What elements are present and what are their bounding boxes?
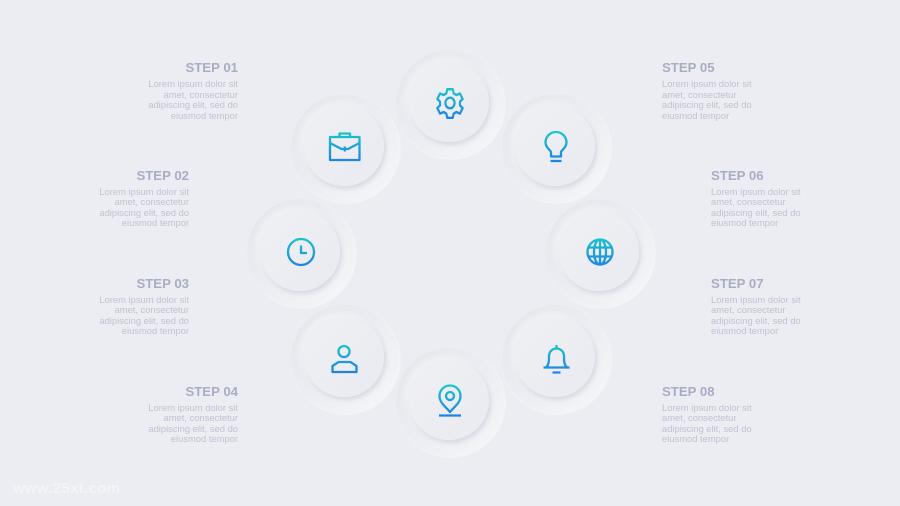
step 03 text: STEP 03 <box>136 276 189 290</box>
step 07 text: eiusmod tempor <box>711 325 778 336</box>
disc: step 03 clock <box>266 230 356 308</box>
step 02 text: STEP 02 <box>136 168 189 182</box>
step 06 text: STEP 06 <box>711 168 764 182</box>
step 08 text: Lorem ipsum dolor sit <box>662 402 752 412</box>
step 06 text: eiusmod tempor <box>711 217 778 228</box>
disc: step 05 bulb <box>522 125 610 202</box>
step 04 text: Lorem ipsum dolor sit <box>148 402 238 412</box>
step 01 text: Lorem ipsum dolor sit <box>148 78 238 89</box>
step 02 text <box>99 168 189 228</box>
step 02 text: adipiscing elit, sed do <box>99 207 189 218</box>
step 05 text: eiusmod tempor <box>662 110 729 121</box>
disc: step 07 bell <box>522 336 610 414</box>
step 04 text <box>148 384 238 444</box>
step 06 text: amet, consectetur <box>711 196 786 207</box>
step 05 text <box>662 60 752 121</box>
icon: clock <box>286 238 316 266</box>
step 01 text: adipiscing elit, sed do <box>148 99 238 110</box>
step 07 text <box>711 276 801 336</box>
step 08 text: amet, consectetur <box>662 412 737 423</box>
step 04 text: amet, consectetur <box>163 412 238 423</box>
step 02 text: Lorem ipsum dolor sit <box>99 186 189 196</box>
disc: step 04 person <box>311 336 400 414</box>
step 07 text: STEP 07 <box>711 276 764 290</box>
step 07 text: adipiscing elit, sed do <box>711 315 801 326</box>
step 08 text <box>662 384 752 444</box>
step 03 text: adipiscing elit, sed do <box>99 315 189 326</box>
icon: briefcase <box>328 132 361 162</box>
step 06 text <box>711 168 801 228</box>
disc: step 01 gear <box>416 82 504 158</box>
step 04 text: STEP 04 <box>185 384 238 398</box>
step 06 text: Lorem ipsum dolor sit <box>711 186 801 196</box>
step 05 text: adipiscing elit, sed do <box>662 99 752 110</box>
step 01 text: STEP 01 <box>185 60 238 75</box>
step 07 text: Lorem ipsum dolor sit <box>711 294 801 304</box>
step 02 text: eiusmod tempor <box>122 217 189 228</box>
step 05 text: STEP 05 <box>662 60 715 75</box>
step 01 text: eiusmod tempor <box>171 110 238 121</box>
step 03 text <box>99 276 189 336</box>
icon: bell <box>544 345 570 374</box>
step 08 text: STEP 08 <box>662 384 715 398</box>
icon: map pin <box>438 384 462 417</box>
step 04 text: adipiscing elit, sed do <box>148 423 238 434</box>
step 03 text: Lorem ipsum dolor sit <box>99 294 189 304</box>
disc: step 02 briefcase <box>310 126 400 202</box>
icon: gear <box>436 88 464 119</box>
step 03 text: amet, consectetur <box>114 304 189 315</box>
step 08 text: adipiscing elit, sed do <box>662 423 752 434</box>
step 07 text: amet, consectetur <box>711 304 786 315</box>
step 01 text: amet, consectetur <box>163 89 238 100</box>
step 05 text: Lorem ipsum dolor sit <box>662 78 752 89</box>
watermark: www.25xt.com <box>13 480 120 497</box>
icon: person <box>331 344 358 374</box>
step 08 text: eiusmod tempor <box>662 433 729 444</box>
disc: step 08 pin <box>416 380 504 456</box>
step 05 text: amet, consectetur <box>662 89 737 100</box>
step 01 text <box>148 60 238 121</box>
step 03 text: eiusmod tempor <box>122 325 189 336</box>
disc: step 06 globe <box>566 230 654 308</box>
icon: light bulb <box>544 130 568 162</box>
icon: globe <box>586 238 614 266</box>
step 04 text: eiusmod tempor <box>171 433 238 444</box>
step 02 text: amet, consectetur <box>114 196 189 207</box>
step 06 text: adipiscing elit, sed do <box>711 207 801 218</box>
